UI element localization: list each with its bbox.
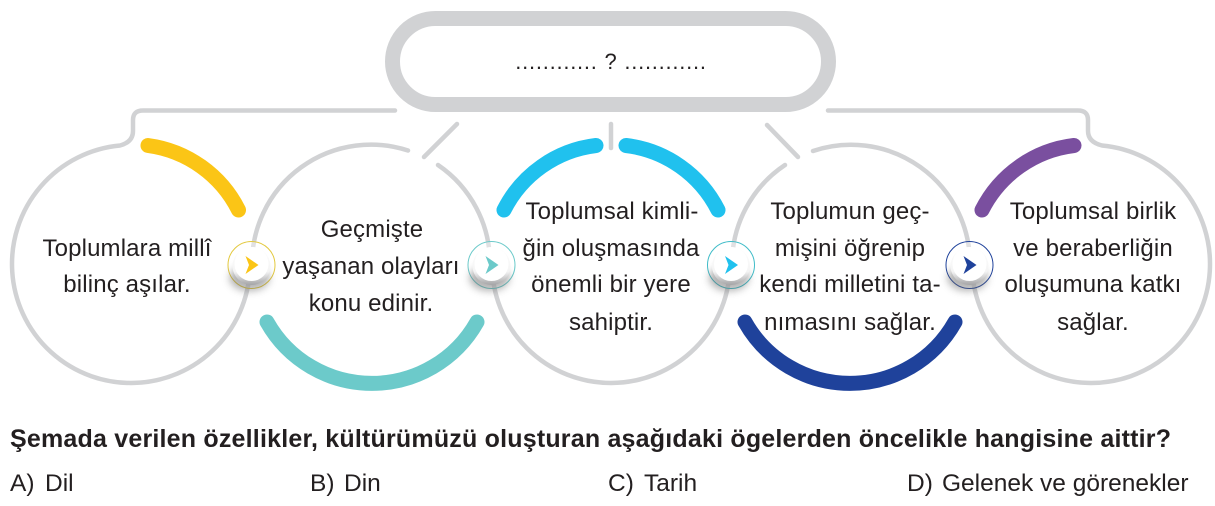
- text: circle 5: sağlar.: [1057, 309, 1129, 336]
- text: circle 5: Toplumsal birlik: [1010, 198, 1177, 225]
- text: circle 3: Toplumsal kimli-: [525, 198, 699, 225]
- title box: ............ ? ............: [515, 49, 707, 74]
- option B: Din: [344, 470, 381, 497]
- text: circle 2: konu edinir.: [309, 290, 433, 317]
- dark blue arc: [745, 322, 955, 383]
- text: circle 2: Geçmişte: [321, 216, 423, 243]
- icon: teal arrow button: [468, 242, 515, 291]
- circle 5 outline with connector: [828, 110, 1210, 383]
- text: circle 3: önemli bir yere: [531, 271, 691, 298]
- option D: D): [907, 470, 933, 497]
- option C: C): [608, 470, 634, 497]
- text: circle 5: ve beraberliğin: [1013, 235, 1173, 262]
- text: circle 4: Toplumun geç-: [770, 198, 930, 225]
- teal arc: [267, 322, 477, 383]
- circle 2 outline: [252, 145, 490, 264]
- spoke lines from title box: [424, 124, 798, 157]
- circle 1 outline with connector: [12, 110, 395, 383]
- option C: Tarih: [644, 470, 697, 497]
- text: circle 3: ğin oluşmasında: [522, 235, 700, 262]
- option D: Gelenek ve görenekler: [942, 470, 1189, 497]
- text: circle 3: sahiptir.: [569, 309, 653, 336]
- title box: [392, 18, 828, 104]
- circle 4 outline: [732, 145, 970, 264]
- icon: yellow arrow button: [228, 242, 275, 291]
- question: Şemada verilen özellikler, kültürümüzü oluşturan aşağıdaki ögelerden öncelikle hangisine aittir?: [10, 425, 1171, 453]
- text: circle 4: nımasını sağlar.: [764, 309, 936, 336]
- cyan arcs: [504, 146, 718, 210]
- text: circle 4: kendi milletini ta-: [759, 271, 941, 298]
- circle 3 outline: [492, 264, 730, 383]
- text: circle 5: oluşumuna katkı: [1004, 271, 1182, 298]
- purple arc: [982, 146, 1074, 210]
- icon: cyan arrow button: [708, 242, 754, 291]
- option B: B): [310, 470, 334, 497]
- icon: dark blue arrow button: [946, 242, 993, 291]
- text: circle 2: yaşanan olayları: [282, 253, 460, 280]
- yellow arc: [148, 146, 238, 210]
- text: circle 4: mişini öğrenip: [775, 235, 925, 262]
- text: circle 1: Toplumlara millî: [42, 235, 213, 262]
- text: circle 1: bilinç aşılar.: [63, 271, 191, 298]
- option A: Dil: [45, 470, 74, 497]
- option A: A): [10, 470, 34, 497]
